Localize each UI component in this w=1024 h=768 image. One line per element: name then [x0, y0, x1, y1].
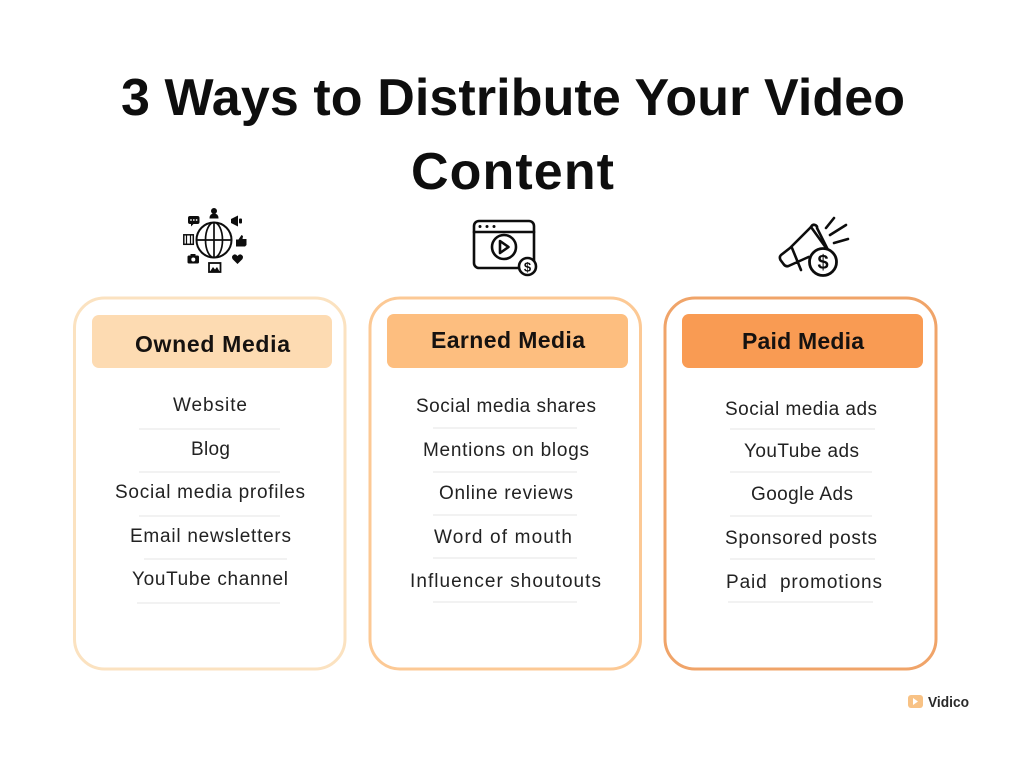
heading: earned media — [387, 314, 628, 368]
heading: earned media: Earned Media — [431, 327, 585, 353]
icon: megaphone with dollar: $ — [817, 252, 829, 274]
icon: video window with dollar — [474, 221, 536, 275]
list: earned media: Influencer shoutouts — [410, 571, 601, 592]
panel: owned media — [74, 298, 345, 669]
list: paid media: YouTube ads — [744, 441, 859, 462]
list: paid media: Google Ads — [751, 484, 853, 505]
logo: Vidico — [908, 694, 969, 711]
title — [121, 69, 905, 201]
icon: globe with social media symbols — [184, 208, 246, 272]
heading: paid media: Paid Media — [742, 328, 864, 354]
list: owned media: Blog — [191, 439, 230, 460]
heading: owned media — [92, 315, 332, 368]
icon: megaphone with dollar — [780, 218, 848, 276]
list: paid media: Social media ads — [725, 399, 877, 420]
list: paid media: Paid promotions — [726, 572, 882, 593]
panel: paid media — [665, 298, 936, 669]
heading: owned media: Owned Media — [135, 331, 290, 357]
list: owned media: Website — [173, 395, 247, 416]
list: earned media: Online reviews — [439, 483, 573, 504]
title: Content — [411, 143, 614, 201]
list: paid media: Sponsored posts — [725, 528, 877, 549]
panel: earned media — [370, 298, 640, 669]
title: 3 Ways to Distribute Your Video — [121, 69, 905, 127]
list: paid media — [725, 399, 882, 602]
list: owned media: Email newsletters — [130, 526, 291, 547]
logo: Vidico: Vidico — [928, 694, 969, 711]
list: earned media — [410, 396, 601, 602]
list: owned media: Social media profiles — [115, 482, 305, 503]
list: earned media: Social media shares — [416, 396, 596, 417]
list: owned media: YouTube channel — [132, 569, 288, 590]
list: earned media: Word of mouth — [434, 527, 572, 548]
heading: paid media — [682, 314, 923, 368]
list: owned media — [115, 395, 305, 603]
list: earned media: Mentions on blogs — [423, 440, 589, 461]
icon: video window with dollar: $ — [524, 260, 532, 274]
